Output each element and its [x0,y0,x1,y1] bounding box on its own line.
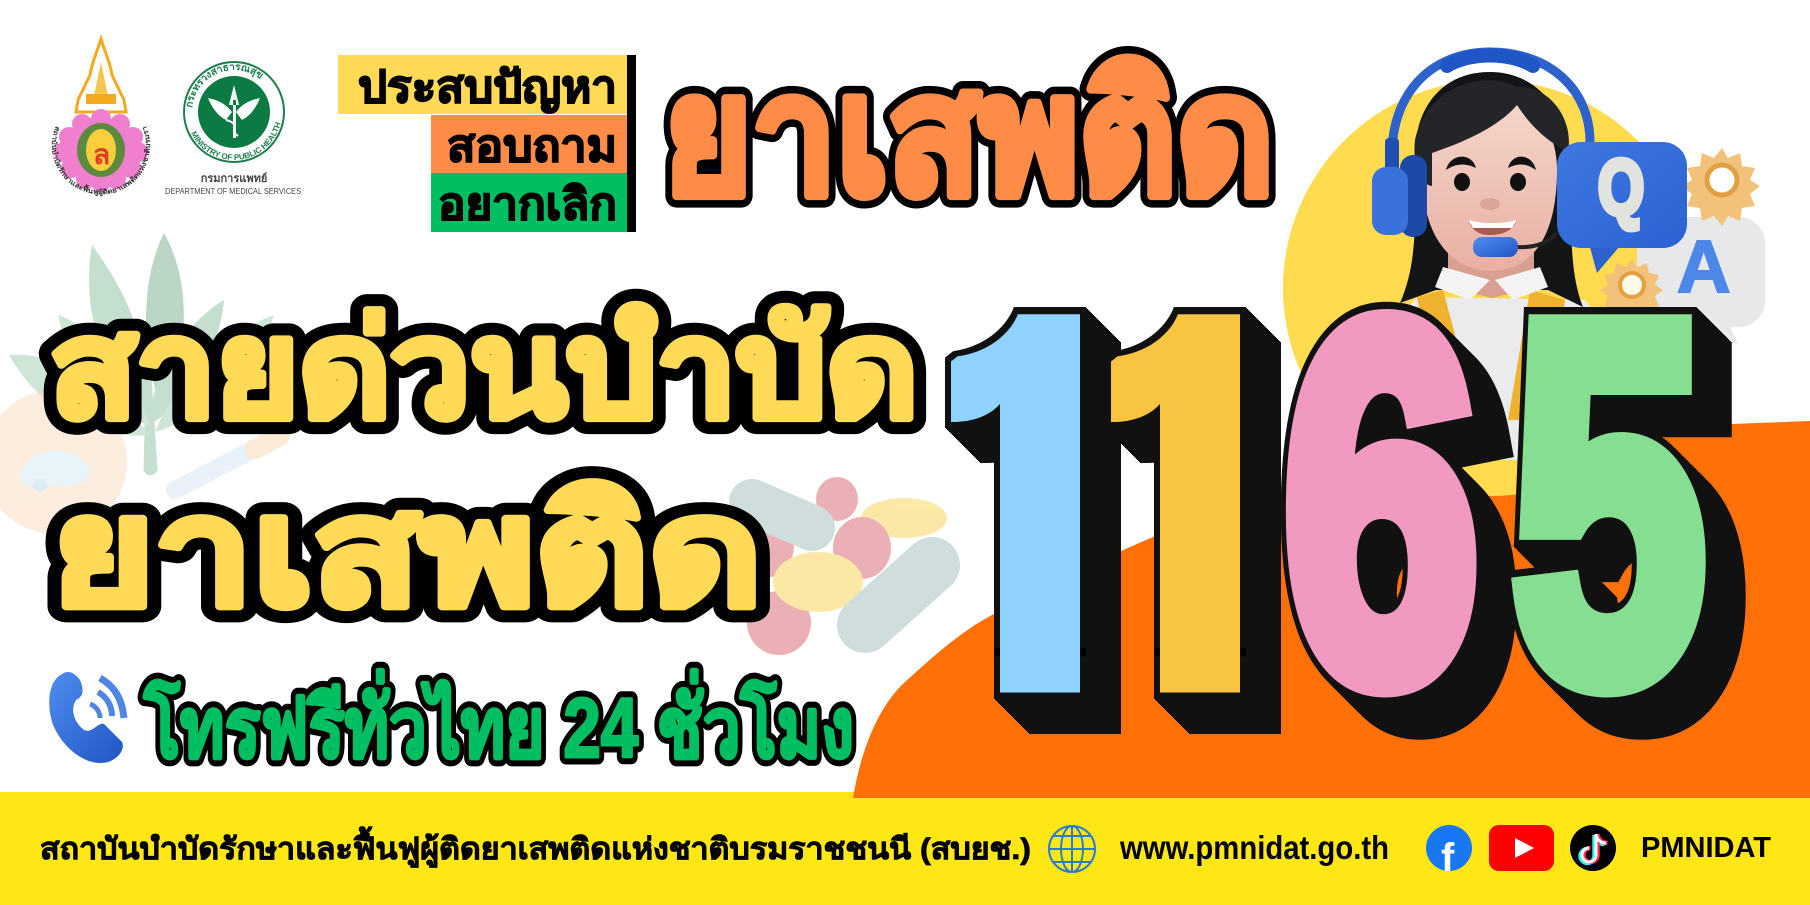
face [1423,100,1557,271]
icon: telephone with signal waves [49,672,124,763]
question bubble: Q [1598,143,1644,231]
hotline digit 6 pink: 6 [1283,218,1479,786]
free call text: โทรฟรีทั่วไทย 24 ชั่วโมง [143,669,854,775]
icon: globe [1049,826,1095,872]
logo: Ministry of Public Health: กระทรวงสาธารณสุข [186,64,264,108]
hotline digit 1 amber [1111,307,1281,734]
headset [1372,52,1590,257]
logo: Ministry of Public Health: กรมการแพทย์ [201,172,267,185]
question bubble [1557,142,1687,273]
hotline digit 1 blue [945,307,1121,734]
hotline digit 5 green: 5 [1512,220,1705,786]
free call text: โทรฟรีทั่วไทย 24 ชั่วโมง [143,669,854,775]
mouth [1468,220,1517,235]
collar [1435,267,1548,300]
eyebrows and eyes [1446,157,1536,191]
logo: Ministry of Public Health [165,61,301,196]
hair bangs [1414,80,1569,186]
faded syringe [175,436,280,490]
logo: Ministry of Public Health: MINISTRY OF PUBLIC HEALTH [191,122,281,160]
icon: facebook: f [1441,836,1455,880]
answer bubble [1637,217,1765,345]
heading: orange word: ยาเสพติด [664,44,1274,228]
logo: institute lotus emblem: ล [93,139,110,170]
logo: Ministry of Public Health: DEPARTMENT OF MEDICAL SERVICES [165,186,301,196]
gears [1600,148,1760,322]
hotline digit 1 blue: 1 [914,220,1146,786]
footer band [0,792,1810,905]
hotline digit 1 blue: 1 [914,220,1146,786]
icon: facebook [1426,825,1472,880]
footer: social handle: PMNIDAT [1641,832,1771,864]
heading: orange word: ยาเสพติด [664,44,1274,228]
torso [1370,297,1640,460]
hotline digit 5 green: 5 [1512,220,1705,786]
hotline digit 6 pink: 6 [1283,218,1479,786]
illustration: support agent with Q and A bubbles [1283,52,1765,496]
faded pills [746,477,947,655]
back hair [1400,72,1583,307]
heading labels stacked [338,55,636,232]
main heading line 2: ยาเสพติด [52,469,762,636]
answer bubble: A [1677,225,1730,308]
footer: institute name: สถาบันบำบัดรักษาและฟื้นฟูผู้ติดยาเสพติดแห่งชาติบรมราชชนนี (สบยช.) [40,826,1031,868]
main heading line 2: ยาเสพติด [52,469,762,636]
hotline digit 1 amber: 1 [1074,220,1306,786]
heading labels stacked: อยากเลิก [438,180,617,229]
logo: institute lotus emblem [52,34,150,196]
icon: tiktok [1570,825,1616,871]
faded powder circle [0,390,127,534]
icon: youtube [1489,825,1554,871]
footer: website: www.pmnidat.go.th [1119,829,1389,866]
main heading line 1: สายด่วนบำบัด [50,296,918,445]
hotline digit 1 amber: 1 [1074,220,1306,786]
main heading line 1: สายด่วนบำบัด [50,296,918,445]
heading labels stacked: ประสบปัญหา [358,63,617,113]
orange curved shape [853,421,1810,798]
faded cannabis leaf [9,233,274,474]
heading labels stacked: สอบถาม [447,122,617,171]
